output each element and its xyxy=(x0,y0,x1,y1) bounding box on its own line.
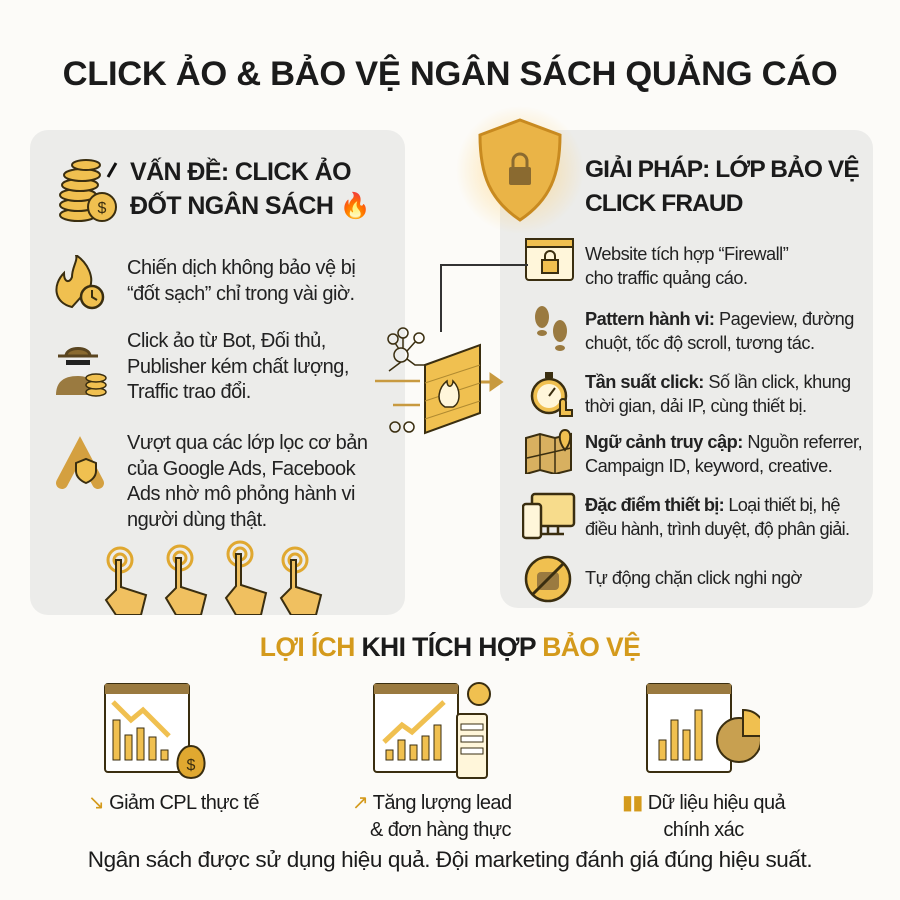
icon: fire clock xyxy=(55,255,104,310)
text: sources: Publisher kém chất lượng, xyxy=(127,356,349,378)
text: firewall xyxy=(585,244,788,288)
text: bypass filters: của Google Ads, Facebook xyxy=(127,458,355,480)
panel: problem xyxy=(30,130,405,615)
arrow: firewall to solution connector xyxy=(440,264,528,332)
panel: solution xyxy=(500,130,873,608)
label: accurate data: ▮▮ Dữ liệu hiệu quả xyxy=(622,792,785,814)
text: behavior pattern: chuột, tốc độ scroll, tương tác. xyxy=(585,333,814,353)
text: firewall: Website tích hợp “Firewall” xyxy=(585,244,788,264)
text: click frequency: thời gian, dải IP, cùng thiết bị. xyxy=(585,396,807,416)
text: bypass filters: Vượt qua các lớp lọc cơ bản xyxy=(127,432,367,454)
label: more leads: ↗ Tăng lượng lead xyxy=(352,792,511,814)
icon: chart down xyxy=(104,683,206,779)
text: auto block: Tự động chặn click nghi ngờ xyxy=(585,568,802,588)
heading: solution: GIẢI PHÁP: LỚP BẢO VỆ xyxy=(585,156,859,183)
heading: problem: VẤN ĐỀ: CLICK ẢO xyxy=(130,158,351,186)
icon: data charts xyxy=(646,683,760,773)
icon: stopwatch xyxy=(530,372,573,417)
text: behavior pattern xyxy=(585,309,854,353)
icon: devices xyxy=(522,492,576,540)
text: click frequency: Tần suất click: Số lần click, khung xyxy=(585,372,851,392)
text: sources xyxy=(127,330,349,403)
footer: Ngân sách được sử dụng hiệu quả. Đội marketing đánh giá đúng hiệu suất. xyxy=(88,847,812,872)
heading: solution: CLICK FRAUD xyxy=(585,190,742,217)
label: lower CPL: ↘ Giảm CPL thực tế xyxy=(88,792,259,814)
text: access context: Ngữ cảnh truy cập: Nguồn referrer, xyxy=(585,432,862,452)
text: behavior pattern: Pattern hành vi: Pageview, đường xyxy=(585,309,854,329)
text: access context xyxy=(585,432,862,476)
text: click frequency xyxy=(585,372,851,416)
icon: coins xyxy=(59,159,118,222)
icon: blocked bot xyxy=(524,556,572,602)
text: device traits xyxy=(585,495,849,539)
icon: ads logo xyxy=(56,436,104,489)
text: device traits: điều hành, trình duyệt, độ phân giải. xyxy=(585,519,849,539)
icon: firewall with traffic xyxy=(375,327,504,434)
icon: clicking hands xyxy=(104,540,322,615)
icon: coins: $ xyxy=(98,200,107,217)
text: sources: Click ảo từ Bot, Đối thủ, xyxy=(127,330,326,352)
label: accurate data xyxy=(622,792,786,841)
text: bypass filters xyxy=(127,432,367,530)
icon: map xyxy=(525,429,572,474)
text: burned quickly xyxy=(127,257,355,304)
icon: chart down: $ xyxy=(187,757,196,774)
text: access context: Campaign ID, keyword, creative. xyxy=(585,456,832,476)
heading: benefits: LỢI ÍCH KHI TÍCH HỢP BẢO VỆ xyxy=(260,632,640,662)
icon: shield xyxy=(462,112,578,228)
icon: footprints xyxy=(535,306,567,351)
icon: chart up xyxy=(373,682,491,779)
text: sources: Traffic trao đổi. xyxy=(127,381,251,403)
heading: problem: ĐỐT NGÂN SÁCH 🔥 xyxy=(130,192,370,220)
title: CLICK ẢO & BẢO VỆ NGÂN SÁCH QUẢNG CÁO xyxy=(63,55,837,93)
text: bypass filters: người dùng thật. xyxy=(127,508,267,530)
icon: hacker xyxy=(56,347,107,397)
icon: locked browser xyxy=(525,238,574,281)
heading: solution xyxy=(585,155,859,217)
text: burned quickly: “đốt sạch” chỉ trong vài giờ. xyxy=(127,282,355,304)
label: more leads xyxy=(352,792,511,841)
text: firewall: cho traffic quảng cáo. xyxy=(585,268,748,288)
label: more leads: & đơn hàng thực xyxy=(370,819,511,841)
text: burned quickly: Chiến dịch không bảo vệ bị xyxy=(127,257,355,279)
heading: problem xyxy=(130,158,370,220)
label: accurate data: chính xác xyxy=(663,819,744,841)
text: device traits: Đặc điểm thiết bị: Loại thiết bị, hệ xyxy=(585,495,840,515)
text: bypass filters: Ads nhờ mô phỏng hành vi xyxy=(127,483,355,505)
